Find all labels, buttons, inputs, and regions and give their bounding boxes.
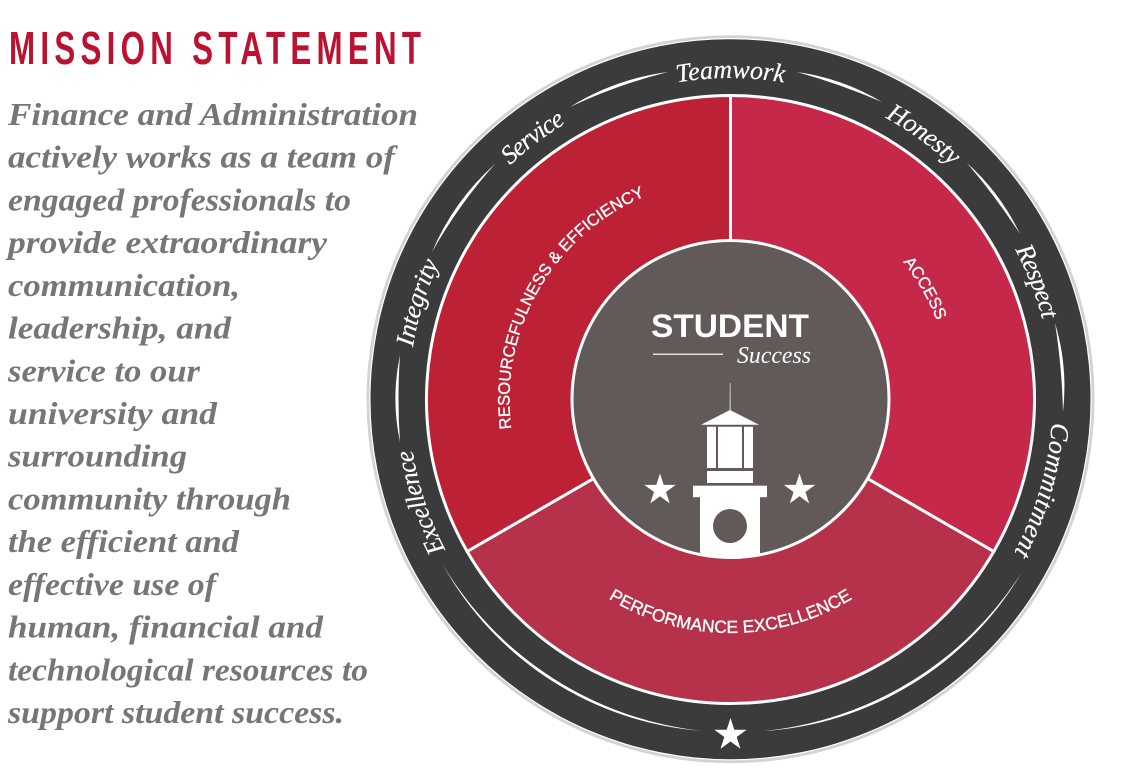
heading: Student: STUDENT bbox=[651, 308, 809, 344]
segment: Resourcefulness & Efficiency bbox=[424, 94, 732, 554]
title: MISSION STATEMENT bbox=[9, 23, 421, 75]
value: Teamwork: Teamwork bbox=[676, 63, 786, 82]
rule bbox=[653, 354, 723, 355]
mission statement text: provide extraordinary bbox=[5, 224, 328, 260]
value: Service: Service bbox=[502, 114, 564, 164]
mission statement text: surrounding bbox=[7, 438, 187, 474]
icon: cupola building bbox=[693, 383, 767, 560]
mission statement text: the efficient and bbox=[8, 523, 240, 559]
mission statement text: communication, bbox=[8, 267, 240, 303]
segment: Performance Excellence: PERFORMANCE EXCELLENCE bbox=[609, 588, 852, 634]
segment: Performance Excellence bbox=[465, 478, 996, 705]
mission statement text: effective use of bbox=[8, 566, 220, 602]
icon: bottom star bbox=[714, 718, 747, 749]
center hub bbox=[572, 240, 889, 560]
mission statement text: actively works as a team of bbox=[8, 139, 399, 175]
circular diagram bbox=[366, 35, 1094, 764]
mission statement text: university and bbox=[8, 395, 218, 431]
value: Excellence: Excellence bbox=[400, 452, 446, 555]
mission statement text bbox=[5, 96, 418, 730]
icon: right star bbox=[784, 474, 815, 503]
mission statement text: technological resources to bbox=[8, 651, 368, 687]
value: Respect: Respect bbox=[1015, 244, 1056, 319]
value: Integrity: Integrity bbox=[396, 258, 440, 348]
segment: Access: ACCESS bbox=[902, 258, 946, 320]
mission statement text: service to our bbox=[7, 352, 201, 388]
mission statement text: leadership, and bbox=[8, 310, 232, 346]
segment: Access bbox=[732, 94, 1036, 554]
icon: left star bbox=[644, 474, 676, 503]
mission statement text: community through bbox=[8, 480, 291, 516]
value: Commitment: Commitment bbox=[1014, 424, 1068, 559]
segment: Resourcefulness & Efficiency: RESOURCEFULNESS & EFFICIENCY bbox=[498, 186, 641, 429]
outer values ring bbox=[366, 35, 1094, 764]
mission statement text: human, financial and bbox=[8, 609, 324, 645]
heading: Success: Success bbox=[737, 343, 811, 369]
value: Honesty: Honesty bbox=[884, 104, 960, 164]
mission statement text: Finance and Administration bbox=[7, 96, 418, 132]
mission statement text: engaged professionals to bbox=[8, 181, 351, 217]
mission statement text: support student success. bbox=[7, 694, 344, 730]
